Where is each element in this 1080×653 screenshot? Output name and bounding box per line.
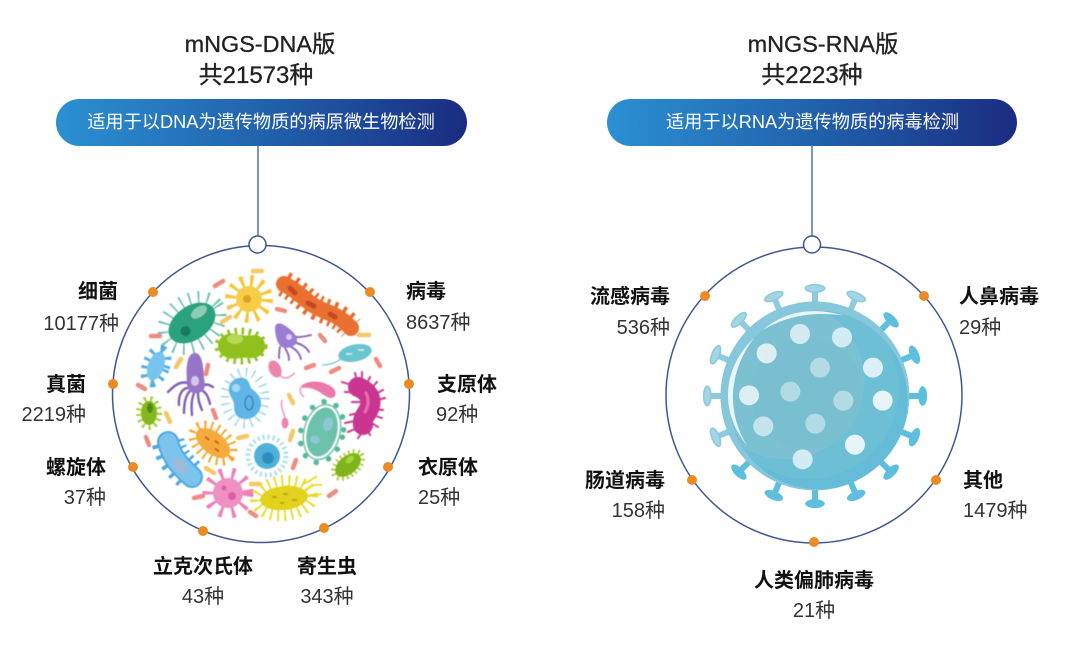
label: 病毒: 8637种 [406,311,470,334]
microbe: lime small [140,400,158,426]
label: 人类偏肺病毒: 21种 [793,599,835,622]
microbe: blue long rod [168,442,192,477]
title: mNGS-RNA: 共2223种 [761,62,863,89]
ring: DNA [108,236,414,542]
label: 真菌: 2219种 [22,403,86,426]
connector line: RNA [811,145,813,237]
microbe: blue round cell [248,437,286,475]
label: 流感病毒 [590,285,670,339]
microbe: purple flagellate [275,323,311,360]
microbe: pink star [210,475,246,511]
label: 真菌: 真菌 [46,372,86,396]
label: 螺旋体 [46,456,106,509]
label: 流感病毒: 536种 [617,316,670,339]
label: 其他: 1479种 [963,499,1028,522]
icon: virus [704,285,927,508]
label: 其他: 其他 [963,469,1003,492]
label: 肠道病毒: 肠道病毒 [585,469,665,492]
ring: RNA [666,236,962,547]
label: 细菌 [43,280,119,335]
panel: mNGS-RNA [585,31,1039,622]
label: 流感病毒: 流感病毒 [590,285,670,308]
label: 支原体: 92种 [436,403,478,426]
microbe: yellow sun [232,282,266,316]
microbe: lime right [330,448,366,482]
label: 立克次氏体: 立克次氏体 [153,554,253,578]
label: 病毒 [406,280,470,334]
label: 寄生虫 [297,555,357,608]
label: 其他 [963,469,1028,522]
pill banner: DNA scope [56,99,467,146]
label: 立克次氏体 [153,554,253,608]
pill banner: RNA scope: 适用于以RNA为遗传物质的病毒检测 [666,112,959,132]
panel: mNGS-DNA [22,31,497,608]
title: mNGS-DNA: 共21573种 [199,62,313,89]
microbe: magenta worm [342,372,385,438]
label: 支原体 [436,373,497,426]
microbe: orange rod [284,284,351,328]
microbe: purple tentacled [168,353,213,415]
microbe: orange oval [188,420,238,466]
microbe: blue small [143,349,169,383]
label: 寄生虫: 343种 [300,585,354,608]
label: 人类偏肺病毒 [754,569,874,622]
microbe: teal oval [294,397,350,467]
label: 螺旋体: 37种 [64,486,106,509]
label: 真菌 [22,372,86,426]
pill banner: RNA scope [607,99,1017,146]
title: mNGS-RNA [748,31,898,89]
microbe: cyan tailed [322,341,373,365]
microbe: lime blob [218,331,265,361]
microbe: yellow flagellated [255,476,322,517]
label: 衣原体: 25种 [418,486,460,509]
label: 人鼻病毒: 人鼻病毒 [959,285,1039,308]
label: 病毒: 病毒 [406,280,446,303]
label: 细菌: 细菌 [78,280,118,303]
connector line: DNA [257,145,259,237]
label: 立克次氏体: 43种 [182,585,224,608]
pill banner: DNA scope: 适用于以DNA为遗传物质的病原微生物检测 [87,112,435,132]
microbe: blue radial cell [225,372,265,424]
title: mNGS-RNA: mNGS-RNA版 [748,31,898,57]
title: mNGS-DNA [185,31,335,89]
label: 肠道病毒: 158种 [612,499,665,522]
label: 人鼻病毒 [959,285,1039,339]
label: 人鼻病毒: 29种 [959,316,1001,339]
label: 支原体: 支原体 [437,373,497,396]
label: 人类偏肺病毒: 人类偏肺病毒 [754,569,874,592]
small rods [138,271,380,516]
microbe: green bacterium [156,289,228,357]
label: 细菌: 10177种 [43,312,119,335]
microbe illustration [138,271,385,517]
label: 衣原体: 衣原体 [418,455,478,479]
label: 衣原体 [418,455,478,509]
title: mNGS-DNA: mNGS-DNA版 [185,31,335,57]
label: 螺旋体: 螺旋体 [46,456,106,479]
microbe: pink tadpoles [266,358,336,428]
label: 寄生虫: 寄生虫 [297,555,357,578]
label: 肠道病毒 [585,469,665,522]
